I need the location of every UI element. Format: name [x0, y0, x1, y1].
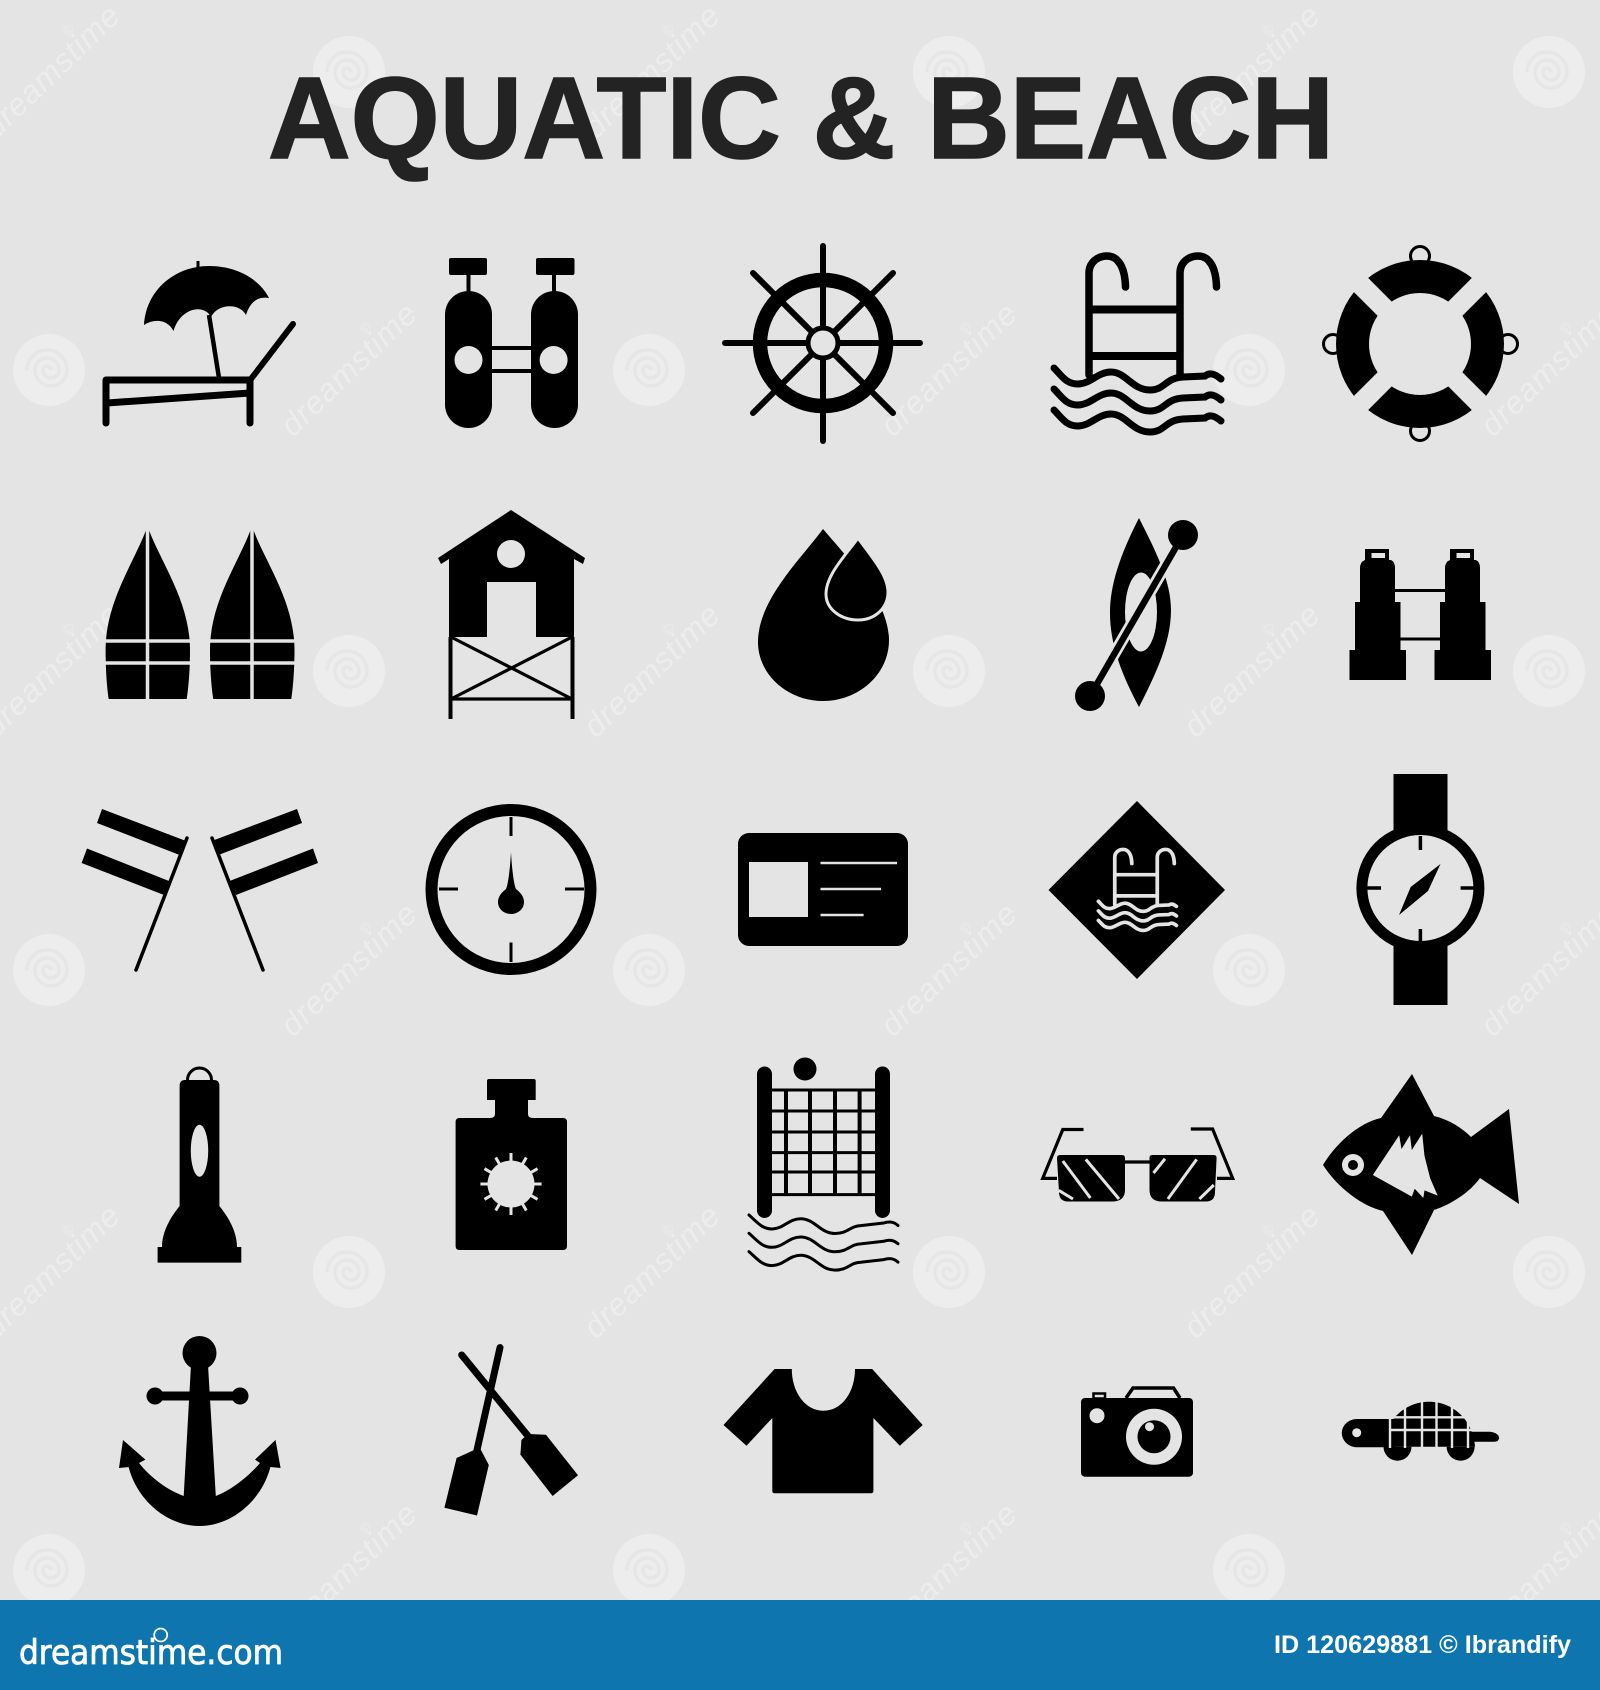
footer image id and credit: ID 120629881 © Ibrandify: [1274, 1631, 1571, 1659]
icon: t-shirt: [724, 1369, 923, 1493]
watermark pattern: dreamstime: [273, 1496, 424, 1643]
icon: ship wheel: [725, 246, 920, 441]
icon: sunglasses: [1043, 1129, 1233, 1202]
icon: anchor: [119, 1336, 281, 1526]
watermark pattern: dreamstime: [873, 1496, 1024, 1643]
icon: binoculars: [1350, 549, 1491, 680]
watermark pattern: ©: [59, 20, 78, 39]
watermark pattern: ©: [956, 918, 975, 937]
watermark pattern: ©: [356, 1518, 375, 1537]
watermark pattern: ©: [1259, 1220, 1278, 1239]
watermark pattern: dreamstime: [576, 597, 727, 744]
icon: flashlight: [158, 1068, 241, 1263]
watermark pattern: dreamstime: [273, 296, 424, 443]
icon: sunscreen bottle: [456, 1079, 567, 1250]
icon: crossed flags: [82, 809, 318, 970]
icon: crossed oars: [444, 1348, 578, 1516]
watermark pattern: ©: [1259, 619, 1278, 638]
watermark pattern: dreamstime: [273, 896, 424, 1043]
icon: sun lounger with umbrella: [106, 261, 293, 423]
icon: gauge: [432, 810, 590, 969]
icon: turtle: [1342, 1400, 1499, 1461]
title: AQUATIC & BEACH: [268, 53, 1334, 183]
icon: pool sign diamond: [1048, 801, 1225, 979]
watermark pattern: ©: [356, 918, 375, 937]
icon: water drops: [758, 529, 889, 701]
watermark pattern: dreamstime: [576, 0, 727, 145]
icon: two boats: [100, 524, 300, 700]
watermark pattern: ©: [956, 318, 975, 337]
watermark pattern: ©: [1556, 1518, 1575, 1537]
watermark pattern: ©: [659, 1220, 678, 1239]
watermark pattern: ©: [356, 318, 375, 337]
watermark pattern: ©: [1259, 20, 1278, 39]
icon: pool ladder: [1054, 256, 1221, 432]
icon: camera: [1081, 1388, 1193, 1477]
icon: kayak and paddle: [1075, 518, 1198, 711]
footer logo: dreamstime.com: [19, 1633, 283, 1673]
watermark pattern: ©: [1556, 318, 1575, 337]
watermark pattern: ©: [659, 619, 678, 638]
footer band: [0, 1600, 1600, 1690]
watermark pattern: dreamstime: [1176, 1198, 1327, 1345]
watermark pattern: ©: [956, 1518, 975, 1537]
watermark pattern: ©: [59, 619, 78, 638]
icon: lifeguard tower: [438, 510, 585, 719]
watermark pattern: dreamstime: [873, 896, 1024, 1043]
icon: water volleyball net: [749, 1058, 898, 1270]
icon: id card: [738, 833, 908, 946]
watermark pattern: ©: [1556, 918, 1575, 937]
watermark pattern: dreamstime: [1176, 0, 1327, 145]
icon: scuba tanks: [445, 258, 578, 428]
watermark pattern: ©: [59, 1220, 78, 1239]
icon: life ring: [1324, 246, 1518, 440]
icon: compass watch: [1362, 774, 1479, 1005]
watermark pattern: ©: [659, 20, 678, 39]
icon: fish: [1323, 1074, 1519, 1255]
watermark pattern: dreamstime: [1176, 597, 1327, 744]
watermark pattern: dreamstime: [576, 1198, 727, 1345]
watermark pattern: dreamstime: [873, 296, 1024, 443]
